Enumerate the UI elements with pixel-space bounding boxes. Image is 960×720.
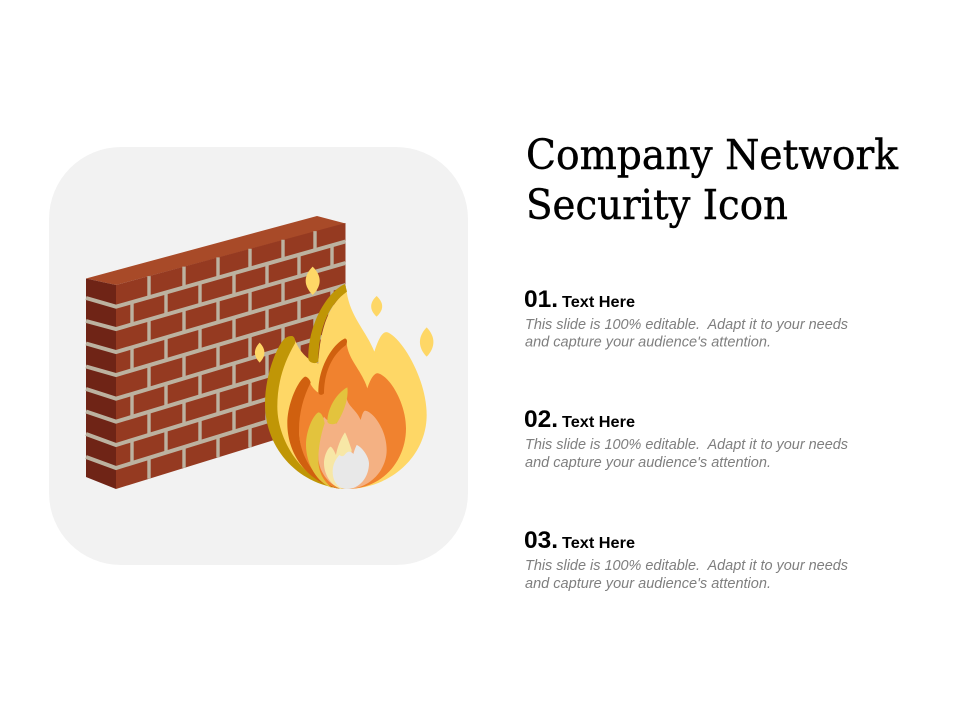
text block 03: Text Here (562, 535, 635, 552)
text block 01 (524, 286, 848, 350)
text block 02: This slide is 100% editable. Adapt it to your needs (525, 437, 848, 453)
spark right small (371, 296, 382, 317)
flame upper dark orange crescent (318, 338, 347, 395)
text block 01: Text Here (562, 294, 635, 311)
spark top (306, 267, 320, 295)
wall left face (86, 278, 116, 489)
flame left dark orange crescent (287, 377, 340, 489)
text block 03 (524, 527, 848, 592)
flame peach layer (318, 398, 387, 489)
icon: flame (255, 267, 433, 489)
text block 02: and capture your audience's attention. (525, 455, 771, 471)
flame left dark gold crescent (265, 336, 347, 489)
flame pale yellow core (324, 432, 352, 489)
text block 01: and capture your audience's attention. (525, 334, 771, 350)
wall front face (116, 223, 346, 489)
panel: icon background (49, 147, 468, 565)
spark right large (420, 327, 433, 357)
flame upper gold crescent (327, 387, 348, 424)
wall horizontal mortar lines (86, 242, 346, 468)
text block 01: This slide is 100% editable. Adapt it to your needs (525, 317, 848, 333)
flame left gold crescent (306, 412, 333, 488)
text block 03: 03. (524, 527, 558, 554)
text block 02: 02. (524, 406, 558, 433)
title (526, 131, 899, 229)
flame upper dark gold crescent (308, 284, 347, 363)
text block 01: 01. (524, 286, 558, 313)
flame outer yellow (273, 292, 427, 489)
title: Company Network (526, 131, 899, 179)
title: Security Icon (526, 181, 788, 229)
flame light grey core (333, 445, 369, 489)
wall top face (86, 216, 346, 285)
icon: brick wall (86, 216, 346, 489)
text block 03: This slide is 100% editable. Adapt it to your needs (525, 558, 848, 574)
spark left (255, 343, 264, 363)
text block 03: and capture your audience's attention. (525, 576, 771, 592)
wall vertical mortar joints (132, 231, 332, 479)
text block 02 (524, 406, 848, 471)
text block 02: Text Here (562, 414, 635, 431)
flame orange layer (299, 343, 406, 489)
